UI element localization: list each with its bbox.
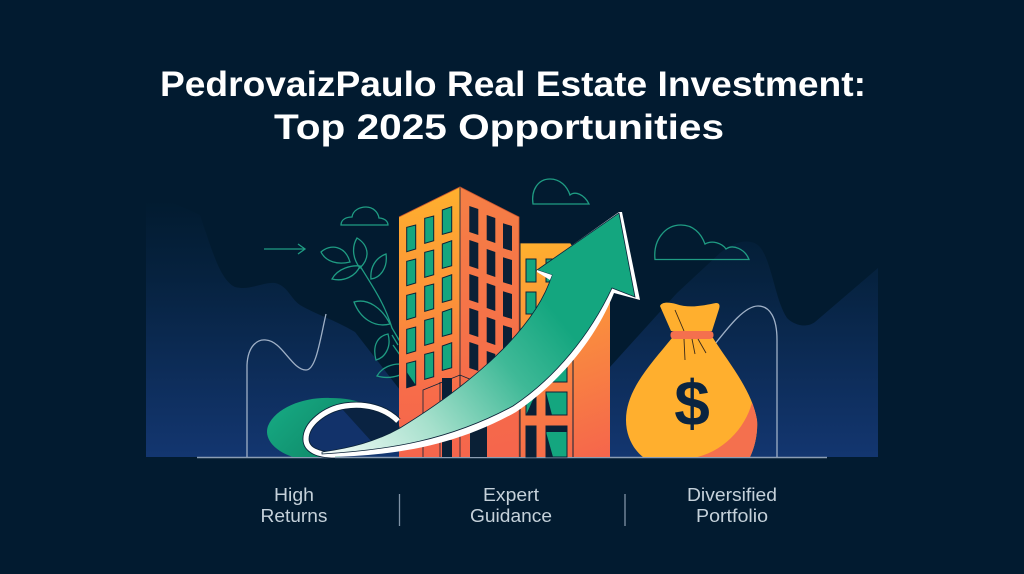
icon: small arrow <box>264 244 305 254</box>
title <box>160 65 866 147</box>
bag neck <box>660 303 720 331</box>
title: Top 2025 Opportunities <box>274 108 724 147</box>
icon: leafy branch <box>321 238 402 377</box>
front building <box>399 187 519 457</box>
building entrance <box>423 375 487 457</box>
left curve line <box>247 314 326 457</box>
label: diversified portfolio: Diversified <box>687 485 777 505</box>
mountains backdrop <box>146 190 878 457</box>
label: expert guidance: Guidance <box>470 506 552 526</box>
divider <box>624 494 626 526</box>
arrow white border <box>322 212 640 457</box>
label: diversified portfolio: Portfolio <box>696 506 768 526</box>
label: high returns: High <box>274 485 314 505</box>
arrow wing highlight <box>537 270 552 280</box>
icon: left cloud <box>341 207 388 225</box>
bag shading <box>698 402 758 457</box>
growth arrow <box>306 212 640 457</box>
side face windows <box>469 206 512 379</box>
label: high returns: Returns <box>260 506 328 526</box>
right curve line <box>715 306 777 457</box>
icon: right cloud <box>655 225 749 260</box>
bag band <box>670 331 714 339</box>
icon: top cloud <box>533 179 589 204</box>
label: high returns <box>260 485 328 526</box>
divider <box>398 494 400 526</box>
label: expert guidance <box>470 485 552 526</box>
back building <box>520 243 610 457</box>
baseline <box>197 456 827 458</box>
bag creases <box>675 310 706 360</box>
title: PedrovaizPaulo Real Estate Investment: <box>160 65 866 104</box>
label: diversified portfolio <box>687 485 777 526</box>
green ribbon <box>267 398 365 457</box>
bag body <box>626 338 757 457</box>
arrow body <box>322 213 635 454</box>
loop interior <box>306 405 400 455</box>
back building windows <box>526 259 567 457</box>
illustration: skyline scene <box>146 179 878 458</box>
front face windows <box>407 207 452 388</box>
label: expert guidance: Expert <box>483 485 539 505</box>
arrow loop outline <box>306 405 398 455</box>
dollar sign: $ <box>674 367 710 439</box>
money bag <box>626 303 770 458</box>
